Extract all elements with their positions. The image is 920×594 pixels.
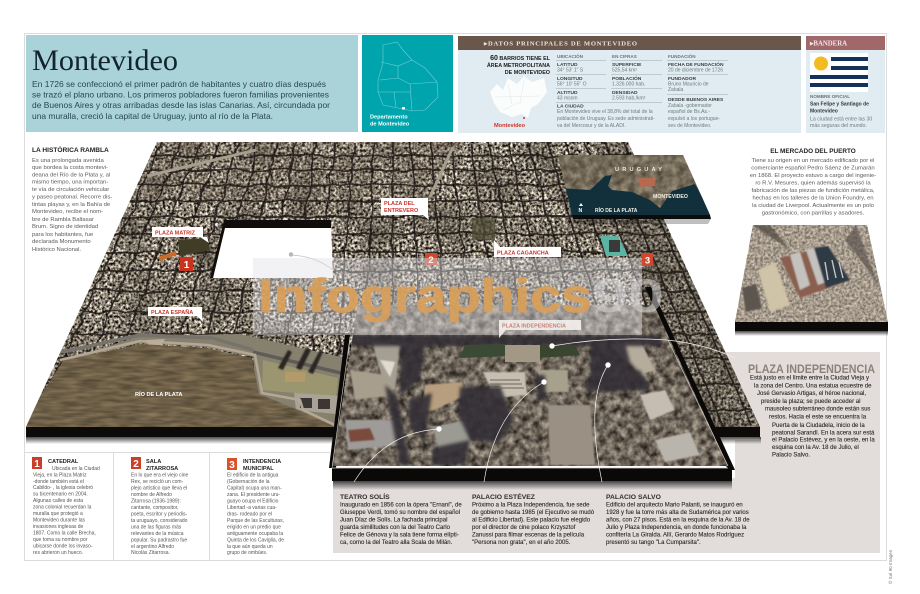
text: plaza independencia: preside la plaza; se puede acceder al bbox=[761, 399, 860, 405]
text: el mercado del puerto: comerciante español Pedro Sáenz de Zumarán bbox=[751, 166, 875, 172]
text: la histórica rambla: y paseo peatonal. Recorre dis- bbox=[32, 194, 112, 200]
text: teatro solís bbox=[340, 492, 462, 546]
coast: buildings bbox=[294, 393, 340, 414]
column 1: catedral: que toma su nombre por bbox=[33, 537, 88, 543]
barrios callout bbox=[487, 55, 551, 76]
text: la histórica rambla: te vía de circulación vehicular bbox=[32, 187, 109, 193]
text: plaza independencia: Palacio Salvo. bbox=[772, 452, 810, 458]
panel: key data bbox=[458, 36, 801, 133]
map label: plaza cagancha bbox=[494, 240, 561, 257]
map label: plaza cagancha: PLAZA CAGANCHA bbox=[497, 250, 549, 256]
text: el mercado del puerto: Tiene su origen en un mercado edificado por el bbox=[752, 158, 874, 164]
text: palacio salvo: años, con 27 pisos. Está en la esquina de la Av. 18 de bbox=[606, 518, 750, 524]
column 2: sala zitarrosa bbox=[131, 457, 188, 556]
data column: fundación: FUNDACIÓN bbox=[668, 52, 696, 59]
title: Montevideo bbox=[32, 44, 178, 77]
column 2: sala zitarrosa: 2 bbox=[133, 459, 139, 470]
column 3: intendencia municipal: grupo de ombúes. bbox=[227, 550, 267, 556]
data column: en cifras bbox=[612, 54, 646, 102]
text: plaza independencia: Puerta de la Ciudadela, inicio de la bbox=[772, 423, 865, 429]
inset map: Uruguay: URUGUAY bbox=[615, 167, 665, 173]
column 1: catedral: invasiones inglesas de bbox=[33, 524, 84, 530]
map of neighbourhoods: Montevideo bbox=[494, 123, 526, 129]
map label: plaza del entrevero: PLAZA DEL bbox=[384, 201, 415, 207]
column 2: sala zitarrosa: el argentino Alfredo bbox=[131, 544, 174, 550]
plaza matriz green bbox=[178, 238, 210, 256]
barrios callout: 60 BARRIOS TIENE EL bbox=[490, 55, 551, 62]
icon: flag of Uruguay bbox=[810, 53, 868, 92]
icon: north arrow: N bbox=[578, 208, 582, 214]
tone patches bbox=[20, 140, 765, 430]
text: la histórica rambla: Brum. Signo de identidad bbox=[32, 224, 98, 230]
column 3: intendencia municipal: 3 bbox=[229, 460, 235, 471]
column 3: intendencia municipal: MUNICIPAL bbox=[243, 466, 274, 472]
text: palacio salvo bbox=[606, 494, 750, 546]
column 1: catedral: 1 bbox=[34, 459, 40, 470]
mercado del puerto aerial block bbox=[730, 223, 890, 336]
text: palacio salvo: confitería La Giralda. Allí, Gerardo Matos Rodríguez bbox=[606, 532, 744, 538]
text: la histórica rambla: mismo tiempo, una importan- bbox=[32, 180, 108, 186]
text: la histórica rambla: Montevideo, recibe el nom- bbox=[32, 209, 103, 215]
text: la histórica rambla: bre de Rambla Baltasar bbox=[32, 217, 94, 223]
column 1: catedral: Ubicada en la Ciudad bbox=[52, 466, 100, 472]
text: teatro solís: ca, como la del Teatro alla Scala de Milán. bbox=[340, 540, 453, 546]
column 2: sala zitarrosa: ta uruguayo, considerado bbox=[131, 518, 188, 524]
column 3: intendencia municipal: Quinta de los Caviglia, de bbox=[227, 538, 284, 544]
column 2: sala zitarrosa: cantante, compositor, bbox=[131, 505, 179, 511]
icon: north arrow bbox=[578, 203, 583, 214]
plaza independencia aerial panel bbox=[329, 287, 735, 490]
column 1: catedral: Algunas calles de esta bbox=[33, 498, 83, 504]
text: palacio estévez: Zanussi para filmar escenas de la película bbox=[472, 532, 585, 538]
column 3: intendencia municipal: antiguamente ocupaba la bbox=[227, 531, 283, 537]
data column: en cifras: POBLACIÓN bbox=[612, 74, 642, 82]
text: plaza independencia: la zona del Centro. Una estatua ecuestre de bbox=[754, 384, 872, 390]
flag notes: NOMBRE OFICIAL bbox=[810, 94, 850, 99]
coast: promenade bbox=[60, 341, 335, 425]
data column: ubicación: 43 msnm bbox=[557, 96, 578, 102]
leader lines bbox=[354, 339, 735, 482]
data column: en cifras: 1.326.000 hab. bbox=[612, 82, 645, 88]
watermark text bbox=[258, 269, 664, 322]
map label: plaza del entrevero: ENTREVERO bbox=[384, 208, 419, 214]
text: el mercado del puerto: en 1868. El proyecto estuvo a cargo del ingenie- bbox=[750, 173, 876, 179]
text: teatro solís: guarda similitudes con la del Teatro Carlo bbox=[340, 525, 451, 531]
flag notes bbox=[810, 94, 872, 129]
data column: fundación: español de Bs.As.- bbox=[668, 109, 710, 115]
column 3: intendencia municipal: guayo ocupa el Edificio bbox=[227, 498, 279, 504]
white cutout bbox=[210, 220, 333, 278]
text: el mercado del puerto: gastronómico, con parrillas y asadores. bbox=[762, 210, 865, 216]
data column: fundación: expulsó a los portugue- bbox=[668, 116, 720, 122]
buildings bbox=[345, 340, 700, 465]
column 3: intendencia municipal: zana. El presidente uru- bbox=[227, 492, 280, 498]
column 3: intendencia municipal: Libertad -a varias cua- bbox=[227, 505, 277, 511]
aerial map bbox=[20, 140, 765, 444]
data column: fundación: 20 de diciembre de 1726 bbox=[668, 68, 723, 74]
data column: fundación: DESDE BUENOS AIRES bbox=[668, 97, 724, 103]
marker 2 bbox=[425, 253, 437, 266]
credit: © Sol 90 Images bbox=[887, 549, 893, 584]
column 2: sala zitarrosa: En lo que era el viejo cine bbox=[131, 472, 188, 478]
barrios callout: ÁREA METROPOLITANA bbox=[487, 62, 550, 69]
text: teatro solís: Inaugurado en 1856 con la ópera "Ernani", de bbox=[340, 502, 462, 508]
text: la histórica rambla: Histórico Nacional. bbox=[32, 247, 81, 253]
text: plaza independencia: esquina con la Av. 18 de Julio, el bbox=[772, 445, 859, 451]
column 3: intendencia municipal: dras- rodeado por el bbox=[227, 512, 272, 518]
data column: ubicación bbox=[557, 52, 655, 129]
inset map: Uruguay bbox=[555, 153, 715, 224]
column 3: intendencia municipal: INTENDENCIA bbox=[243, 459, 281, 465]
text: plaza independencia: Está justo en el límite entre la Ciudad Vieja y bbox=[750, 376, 869, 382]
heading bar: datos principales: ▸DATOS PRINCIPALES DE MONTEVIDEO bbox=[483, 40, 637, 48]
text: palacio salvo: Julio y Plaza Independencia, en donde funcionaba la bbox=[606, 525, 747, 531]
intro text: una muralla, creció la capital de Uruguay, junto al río de la Plata. bbox=[32, 112, 273, 121]
data column: ubicación: LA CIUDAD bbox=[557, 104, 584, 110]
column 1: catedral: muralla que protegió a bbox=[33, 511, 83, 517]
text: plaza independencia: José Gervasio Artigas, el héroe nacional, bbox=[757, 391, 866, 397]
data column: en cifras: DENSIDAD bbox=[612, 90, 638, 96]
column 3: intendencia municipal: erigido en un predio que bbox=[227, 524, 281, 530]
marker 1 bbox=[180, 257, 193, 271]
plaza gardens bbox=[460, 344, 506, 358]
panel: introduction bbox=[26, 35, 358, 132]
department label bbox=[370, 114, 410, 128]
data column: fundación: Zabala -gobernador bbox=[668, 103, 712, 109]
map of neighbourhoods bbox=[490, 76, 547, 129]
text: palacio estévez: "Persona non grata", en el año 2005. bbox=[472, 540, 571, 546]
column 1: catedral: Vieja, en la Plaza Matriz bbox=[33, 472, 87, 478]
marker 3 bbox=[642, 253, 653, 266]
roads bbox=[147, 147, 453, 197]
data column: ubicación: va del Mercosur y de la ALADI. bbox=[557, 123, 626, 129]
data column: fundación: Zabala bbox=[668, 87, 684, 93]
flag notes: San Felipe y Santiago de bbox=[810, 102, 869, 108]
data column: en cifras: 525,54 km² bbox=[612, 68, 637, 74]
watermark band bbox=[253, 258, 642, 335]
intro text bbox=[32, 80, 330, 121]
column 2: sala zitarrosa: Zitarrosa (1936-1989): bbox=[131, 498, 181, 504]
map label: plaza del entrevero bbox=[381, 198, 429, 220]
data column: ubicación: En Montevideo vive el 38,8% del total de la bbox=[557, 109, 653, 115]
column 2: sala zitarrosa: nombre de Alfredo bbox=[131, 492, 172, 498]
watermark text: Infographics bbox=[258, 269, 592, 322]
column 1: catedral: su bicentenario en 2004. bbox=[33, 492, 88, 498]
column 2: sala zitarrosa: plejo artístico que lleva el bbox=[131, 486, 187, 492]
text: teatro solís: Juan Díaz de Solís. La fachada principal bbox=[340, 518, 447, 524]
map label: plaza matriz: PLAZA MATRIZ bbox=[155, 230, 196, 236]
column 1: catedral: zona colonial recuerdan la bbox=[33, 504, 92, 510]
text: plaza independencia bbox=[748, 362, 875, 458]
text: teatro solís: Felice de Génova y la sala tiene forma elípti- bbox=[340, 532, 459, 538]
column 1: catedral: Montevideo durante las bbox=[33, 518, 85, 524]
text: teatro solís: TEATRO SOLÍS bbox=[340, 492, 390, 501]
flag notes: más seguras del mundo. bbox=[810, 123, 867, 129]
text: la histórica rambla: que bordea la costa montevi- bbox=[32, 165, 108, 171]
intro text: En 1726 se confeccionó el primer padrón de habitantes y cuatro días después bbox=[32, 80, 326, 89]
coast: road band bbox=[60, 334, 345, 427]
flag notes: Montevideo bbox=[810, 108, 838, 114]
data column: ubicación: 34° 53' 1" S bbox=[557, 68, 584, 74]
icon: Uruguay outline bbox=[378, 42, 438, 111]
column 1: catedral: 1807. Como la calle Brecha, bbox=[33, 530, 96, 536]
intro text: de Buenos Aires y otras arribadas desde las islas Canarias. Así, circundada por bbox=[32, 101, 330, 110]
panel: plaza independencia text background bbox=[333, 352, 880, 553]
column 2: sala zitarrosa: una de las figuras más bbox=[131, 524, 182, 530]
data column: fundación bbox=[668, 52, 724, 129]
column 2: sala zitarrosa: relevantes de la música bbox=[131, 531, 184, 537]
text: palacio estévez: PALACIO ESTÉVEZ bbox=[472, 492, 535, 501]
data column: ubicación: UBICACIÓN bbox=[557, 52, 584, 59]
data column: fundación: ses de Montevideo. bbox=[668, 123, 711, 129]
map label: plaza independencia bbox=[499, 320, 581, 338]
intro text: se trazó el plano urbano. Los primeros pobladores fueron familias provenientes bbox=[32, 90, 329, 100]
data column: en cifras: SUPERFICIE bbox=[612, 62, 642, 68]
department label: Departamento bbox=[370, 114, 408, 120]
flag notes: La ciudad está entre las 30 bbox=[810, 116, 872, 122]
text: plaza independencia: PLAZA INDEPENDENCIA bbox=[748, 362, 875, 376]
text: la histórica rambla: Es una prolongada avenida bbox=[32, 158, 104, 164]
text: la histórica rambla: tintas playas y, en la Bahía de bbox=[32, 202, 111, 208]
text: palacio estévez: Próximo a la Plaza Independencia, fue sede bbox=[472, 502, 590, 508]
text: la histórica rambla: declarada Monumento bbox=[32, 239, 91, 245]
river bbox=[20, 344, 335, 427]
marker 2: 2 bbox=[428, 255, 434, 266]
panel base and walls bbox=[329, 335, 350, 468]
data column: fundación: FECHA DE FUNDACIÓN bbox=[668, 60, 724, 68]
department label: de Montevideo bbox=[370, 122, 410, 128]
text: palacio salvo: PALACIO SALVO bbox=[606, 494, 661, 501]
text: plaza independencia: mausoleo subterráneo donde están sus bbox=[765, 406, 870, 412]
column 3: intendencia municipal: El edificio de la antigua bbox=[227, 472, 279, 478]
text: la histórica rambla bbox=[32, 145, 112, 253]
plaza cagancha & pool bbox=[472, 218, 495, 240]
column 1: catedral: Cabildo- , la iglesia celebró bbox=[33, 485, 93, 491]
text: plaza independencia: peatonal Sarandí. En la acera sur está bbox=[772, 430, 875, 436]
text: el mercado del puerto: ro R.V. Mesures, quien además supervisó la bbox=[755, 180, 871, 186]
map label: plaza españa bbox=[148, 307, 203, 322]
text: palacio estévez: por el director de cine polaco Krzysztof bbox=[472, 525, 576, 531]
column 1: catedral: ubicarse donde los invaso- bbox=[33, 544, 93, 550]
heading bar: bandera: ▸BANDERA bbox=[809, 40, 847, 48]
text: palacio salvo: presentó su tango "La Cumparsita". bbox=[606, 540, 701, 546]
text: el mercado del puerto bbox=[750, 148, 876, 216]
text: el mercado del puerto: la ciudad de Liverpool. Actualmente es un polo bbox=[752, 203, 875, 209]
column 2: sala zitarrosa: Nicolás Zitarrosa. bbox=[131, 550, 170, 556]
text: la histórica rambla: LA HISTÓRICA RAMBLA bbox=[32, 145, 109, 154]
marker 3: 3 bbox=[645, 256, 650, 266]
text: plaza independencia: el Palacio Estévez, y en la oeste, en la bbox=[772, 438, 875, 444]
map label: río de la plata: RÍO DE LA PLATA bbox=[135, 390, 182, 398]
bottom columns frame bbox=[24, 452, 330, 560]
street grid bbox=[20, 142, 765, 427]
text: el mercado del puerto: fabricación de las piezas de fundición metálica, bbox=[751, 188, 875, 194]
inset map: Uruguay: RÍO DE LA PLATA bbox=[595, 206, 638, 214]
map label: plaza independencia: PLAZA INDEPENDENCIA bbox=[502, 324, 566, 330]
coast: tree shadows bbox=[278, 348, 323, 374]
text: el mercado del puerto: EL MERCADO DEL PUERTO bbox=[770, 148, 856, 155]
map base wall bbox=[26, 427, 760, 437]
text: palacio estévez: al Edificio Libertad). Este palacio fue elegido bbox=[472, 518, 591, 524]
inset map: Uruguay: MONTEVIDEO bbox=[653, 194, 688, 200]
data column: en cifras: EN CIFRAS bbox=[612, 54, 637, 59]
coast: park bbox=[262, 360, 338, 397]
data column: ubicación: LATITUD bbox=[557, 62, 578, 68]
text: plaza independencia: restos. Hacia el este se encuentra la bbox=[769, 414, 867, 420]
shadows bbox=[345, 335, 660, 465]
text: palacio estévez bbox=[472, 492, 595, 546]
map label: plaza matriz bbox=[152, 227, 209, 243]
text: palacio estévez: de gobierno hasta 1985 (el Ejecutivo se mudó bbox=[472, 510, 595, 516]
data column: fundación: Bruno Mauricio de bbox=[668, 82, 709, 88]
text: palacio salvo: 1928 y fue la torre más alta de Sudamérica por varios bbox=[606, 510, 749, 516]
heading bar: datos principales bbox=[458, 36, 801, 50]
text: palacio salvo: Edificio del arquitecto Mario Palanti, se inauguró en bbox=[606, 502, 743, 508]
column 2: sala zitarrosa: popular. Su padrastro fue bbox=[131, 538, 187, 544]
text: el mercado del puerto: hechas en los talleres de la Union Foundry, en bbox=[752, 196, 874, 202]
column 2: sala zitarrosa: Rex, se recicló un com- bbox=[131, 479, 184, 485]
data column: fundación: FUNDADOR bbox=[668, 76, 696, 82]
text: la histórica rambla: para los habitantes, fue bbox=[32, 232, 94, 238]
data column: ubicación: ALTITUD bbox=[557, 90, 578, 96]
column 3: intendencia municipal: Parque de las Esculturas, bbox=[227, 518, 284, 524]
coast: dark road bbox=[253, 352, 345, 374]
data column: ubicación: población de Uruguay. Es sede administrati- bbox=[557, 116, 655, 122]
panel: bandera bbox=[806, 36, 885, 133]
column 1: catedral bbox=[32, 457, 100, 556]
column 3: intendencia municipal: la que aún queda un bbox=[227, 544, 273, 550]
data column: ubicación: LONGITUD bbox=[557, 76, 583, 82]
column 2: sala zitarrosa: ZITARROSA bbox=[146, 466, 178, 472]
watermark text: 90 bbox=[592, 269, 664, 322]
column 1: catedral: CATEDRAL bbox=[48, 459, 79, 465]
panel: departamento locator map bbox=[362, 35, 453, 132]
column 1: catedral: res abrieron un hueco. bbox=[33, 550, 83, 556]
data column: en cifras: 2.593 hab./km² bbox=[612, 96, 646, 102]
column 3: intendencia municipal bbox=[227, 458, 284, 556]
column 1: catedral: -donde también está el bbox=[33, 479, 84, 485]
data column: ubicación: 56° 10' 55" O bbox=[557, 82, 587, 88]
column 2: sala zitarrosa: poeta, escritor y periodis- bbox=[131, 512, 187, 518]
column 2: sala zitarrosa: SALA bbox=[146, 459, 161, 465]
text: teatro solís: Giuseppe Verdi, tomó su nombre del español bbox=[340, 510, 460, 516]
text: la histórica rambla: deana del Río de la Plata y, al bbox=[32, 172, 110, 178]
barrios callout: DE MONTEVIDEO bbox=[505, 70, 550, 76]
column 3: intendencia municipal: (Gobernación de la bbox=[227, 479, 270, 485]
column 3: intendencia municipal: Capital) ocupa una man- bbox=[227, 486, 282, 492]
marker 1: 1 bbox=[184, 260, 190, 271]
map label: plaza españa: PLAZA ESPAÑA bbox=[151, 309, 193, 316]
